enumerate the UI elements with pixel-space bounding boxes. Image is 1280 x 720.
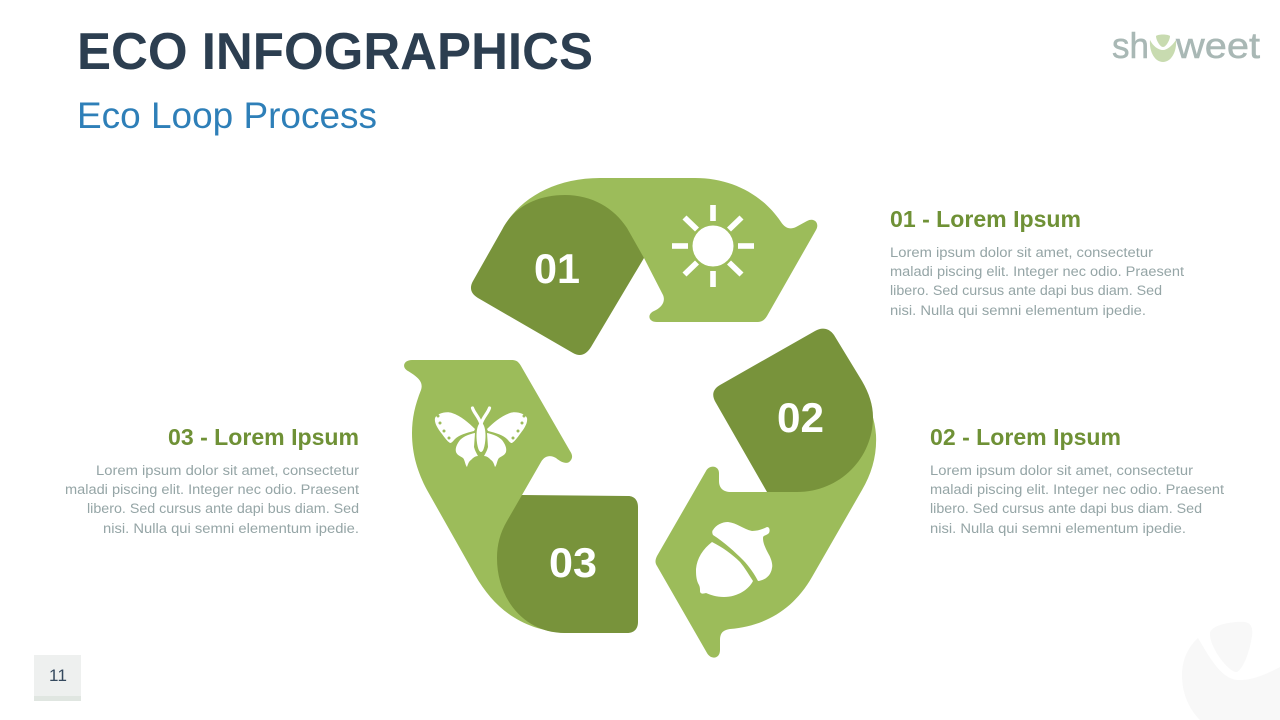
text block 02 [930,424,1224,536]
icon: acorn [696,522,772,597]
body 02: libero. Sed cursus ante dapi bus diam. Sed [930,501,1202,516]
body 02: nisi. Nulla qui semni elementum ipedie. [930,521,1186,536]
logo: showeet [1112,25,1260,66]
heading 03: 03 - Lorem Ipsum [168,424,359,450]
heading 02: 02 - Lorem Ipsum [930,424,1121,450]
icon: butterfly [435,408,527,467]
number 03: 03 [549,539,597,586]
logo: showeet: weet [1175,25,1260,66]
body 01: Lorem ipsum dolor sit amet, consectetur [890,245,1154,260]
number 01: 01 [534,245,580,292]
title: ECO INFOGRAPHICS [77,23,593,81]
number tab 01 [471,195,644,355]
number tab 03 [497,495,638,633]
body 01: maladi piscing elit. Integer nec odio. Praesent [890,264,1184,279]
body 01: nisi. Nulla qui semni elementum ipedie. [890,303,1146,318]
watermark: bottom right logo [1182,622,1280,720]
body 02: maladi piscing elit. Integer nec odio. Praesent [930,482,1224,497]
page number badge: 11 [49,666,67,685]
heading 01: 01 - Lorem Ipsum [890,206,1081,232]
text block 03 [65,424,360,536]
body 02: Lorem ipsum dolor sit amet, consectetur [930,463,1194,478]
number 02: 02 [777,394,824,441]
body 01 [890,245,1184,318]
arrow body 01 [503,178,817,322]
text block 01 [890,206,1184,318]
subtitle: Eco Loop Process [77,95,377,136]
loop segment 03 [404,360,638,633]
body 03 [65,463,360,536]
body 03: libero. Sed cursus ante dapi bus diam. Sed [87,501,359,516]
arrow body 03 [404,360,572,633]
logo: showeet: sh [1112,25,1149,66]
page number badge [34,655,81,701]
number tab 02 [713,329,873,492]
body 02 [930,463,1224,536]
body 03: Lorem ipsum dolor sit amet, consectetur [96,463,360,478]
body 01: libero. Sed cursus ante dapi bus diam. Sed [890,283,1162,298]
icon: sun [672,205,754,287]
body 03: maladi piscing elit. Integer nec odio. Praesent [65,482,359,497]
arrow body 02 [656,392,876,658]
body 03: nisi. Nulla qui semni elementum ipedie. [103,521,359,536]
loop segment 01 [471,178,817,355]
loop segment 02 [656,329,876,658]
